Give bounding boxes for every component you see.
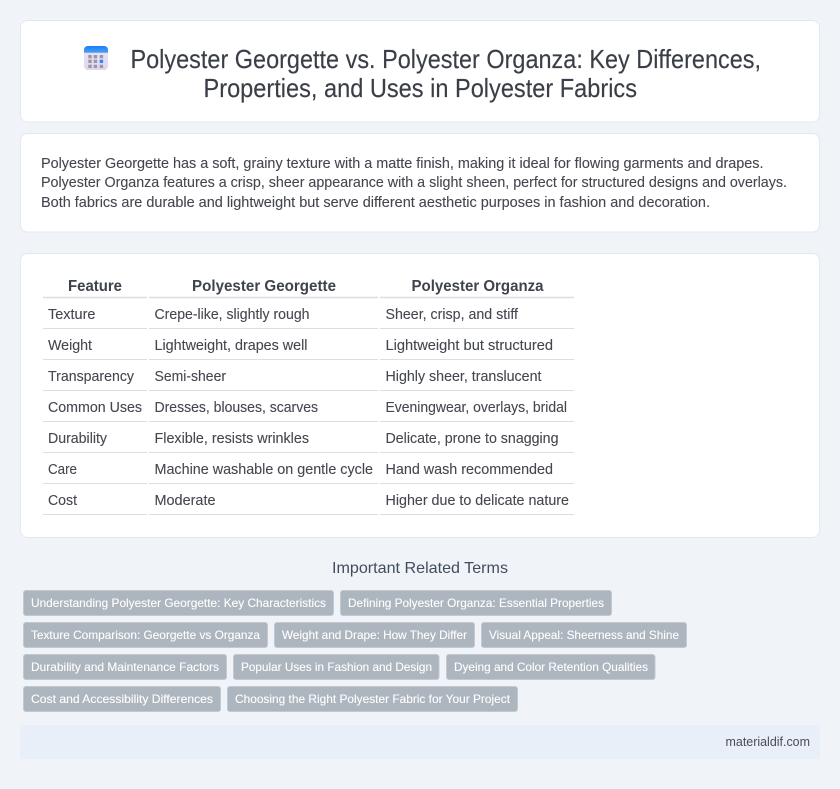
table row: durability: Delicate, prone to snagging <box>386 431 558 447</box>
table header: Polyester Organza <box>412 278 544 295</box>
table row: weight <box>43 338 574 360</box>
title: Polyester Georgette vs. Polyester Organza: Key Differences, <box>130 44 761 74</box>
tag: Defining Polyester Organza: Essential Properties <box>348 596 604 610</box>
table row: durability: Durability <box>48 431 108 447</box>
text block: introduction paragraph: Both fabrics are durable and lightweight but serve different aesthetic purposes in fashion and decoration. <box>41 195 710 211</box>
title <box>130 44 761 103</box>
panel: introduction <box>20 134 820 232</box>
panel: comparison table <box>20 254 820 538</box>
tag: Texture Comparison: Georgette vs Organza <box>31 628 260 642</box>
tag <box>228 686 518 712</box>
tag: Durability and Maintenance Factors <box>31 660 219 674</box>
table row: care <box>43 462 574 484</box>
table row: texture <box>43 307 574 328</box>
panel: related term tags <box>24 590 686 712</box>
table row: transparency: Semi-sheer <box>154 369 226 385</box>
table row: common uses: Eveningwear, overlays, bridal <box>386 400 567 416</box>
tag <box>234 654 439 680</box>
table header <box>43 278 574 298</box>
tag: Visual Appeal: Sheerness and Shine <box>489 628 679 642</box>
icon: calendar <box>84 46 108 70</box>
table row: durability <box>43 431 574 452</box>
panel: title card <box>20 20 820 122</box>
table row: cost: Moderate <box>154 493 216 509</box>
tag: Weight and Drape: How They Differ <box>282 628 467 642</box>
table row: care: Care <box>48 462 77 478</box>
table row: cost <box>43 493 574 514</box>
tag <box>24 686 220 712</box>
tag: Understanding Polyester Georgette: Key Characteristics <box>31 596 326 610</box>
text block: introduction paragraph: Polyester Organza features a crisp, sheer appearance with a slight sheen, perfect for structured designs and overlays. <box>41 175 787 191</box>
table row: care: Machine washable on gentle cycle <box>154 462 373 478</box>
table row: common uses: Common Uses <box>48 400 142 416</box>
tag: Popular Uses in Fashion and Design <box>241 660 432 674</box>
table row: weight: Lightweight but structured <box>386 338 553 354</box>
text block: introduction paragraph: Polyester Georgette has a soft, grainy texture with a matte finish, making it ideal for flowing garments and drapes. <box>41 156 764 172</box>
tag <box>274 622 474 648</box>
table row: texture: Crepe-like, slightly rough <box>154 307 310 323</box>
tag <box>24 622 268 648</box>
tag <box>340 590 612 616</box>
text block: introduction paragraph <box>41 156 787 211</box>
table header: Feature <box>68 278 122 295</box>
tag <box>24 654 226 680</box>
footer source text: materialdif.com <box>726 734 810 749</box>
tag: Dyeing and Color Retention Qualities <box>454 660 648 674</box>
heading: important related terms: Important Related Terms <box>332 560 508 577</box>
table row: weight: Lightweight, drapes well <box>154 338 308 354</box>
table row: durability: Flexible, resists wrinkles <box>154 431 309 447</box>
tag <box>24 590 334 616</box>
tag <box>482 622 686 648</box>
footer <box>20 725 820 759</box>
table header: Polyester Georgette <box>192 278 336 295</box>
table row: texture: Texture <box>48 307 96 323</box>
table row: common uses: Dresses, blouses, scarves <box>154 400 318 416</box>
table row: care: Hand wash recommended <box>386 462 553 478</box>
table row: weight: Weight <box>48 338 92 354</box>
tag <box>446 654 655 680</box>
table row: transparency: Highly sheer, translucent <box>386 369 542 385</box>
table row: cost: Cost <box>48 493 77 509</box>
table row: texture: Sheer, crisp, and stiff <box>386 307 519 323</box>
table row: cost: Higher due to delicate nature <box>386 493 569 509</box>
title: Properties, and Uses in Polyester Fabrics <box>204 73 637 103</box>
table row: transparency: Transparency <box>48 369 135 385</box>
tag: Cost and Accessibility Differences <box>31 692 213 706</box>
table row: common uses <box>43 400 574 422</box>
table row: transparency <box>43 369 574 390</box>
tag: Choosing the Right Polyester Fabric for Your Project <box>235 692 511 706</box>
